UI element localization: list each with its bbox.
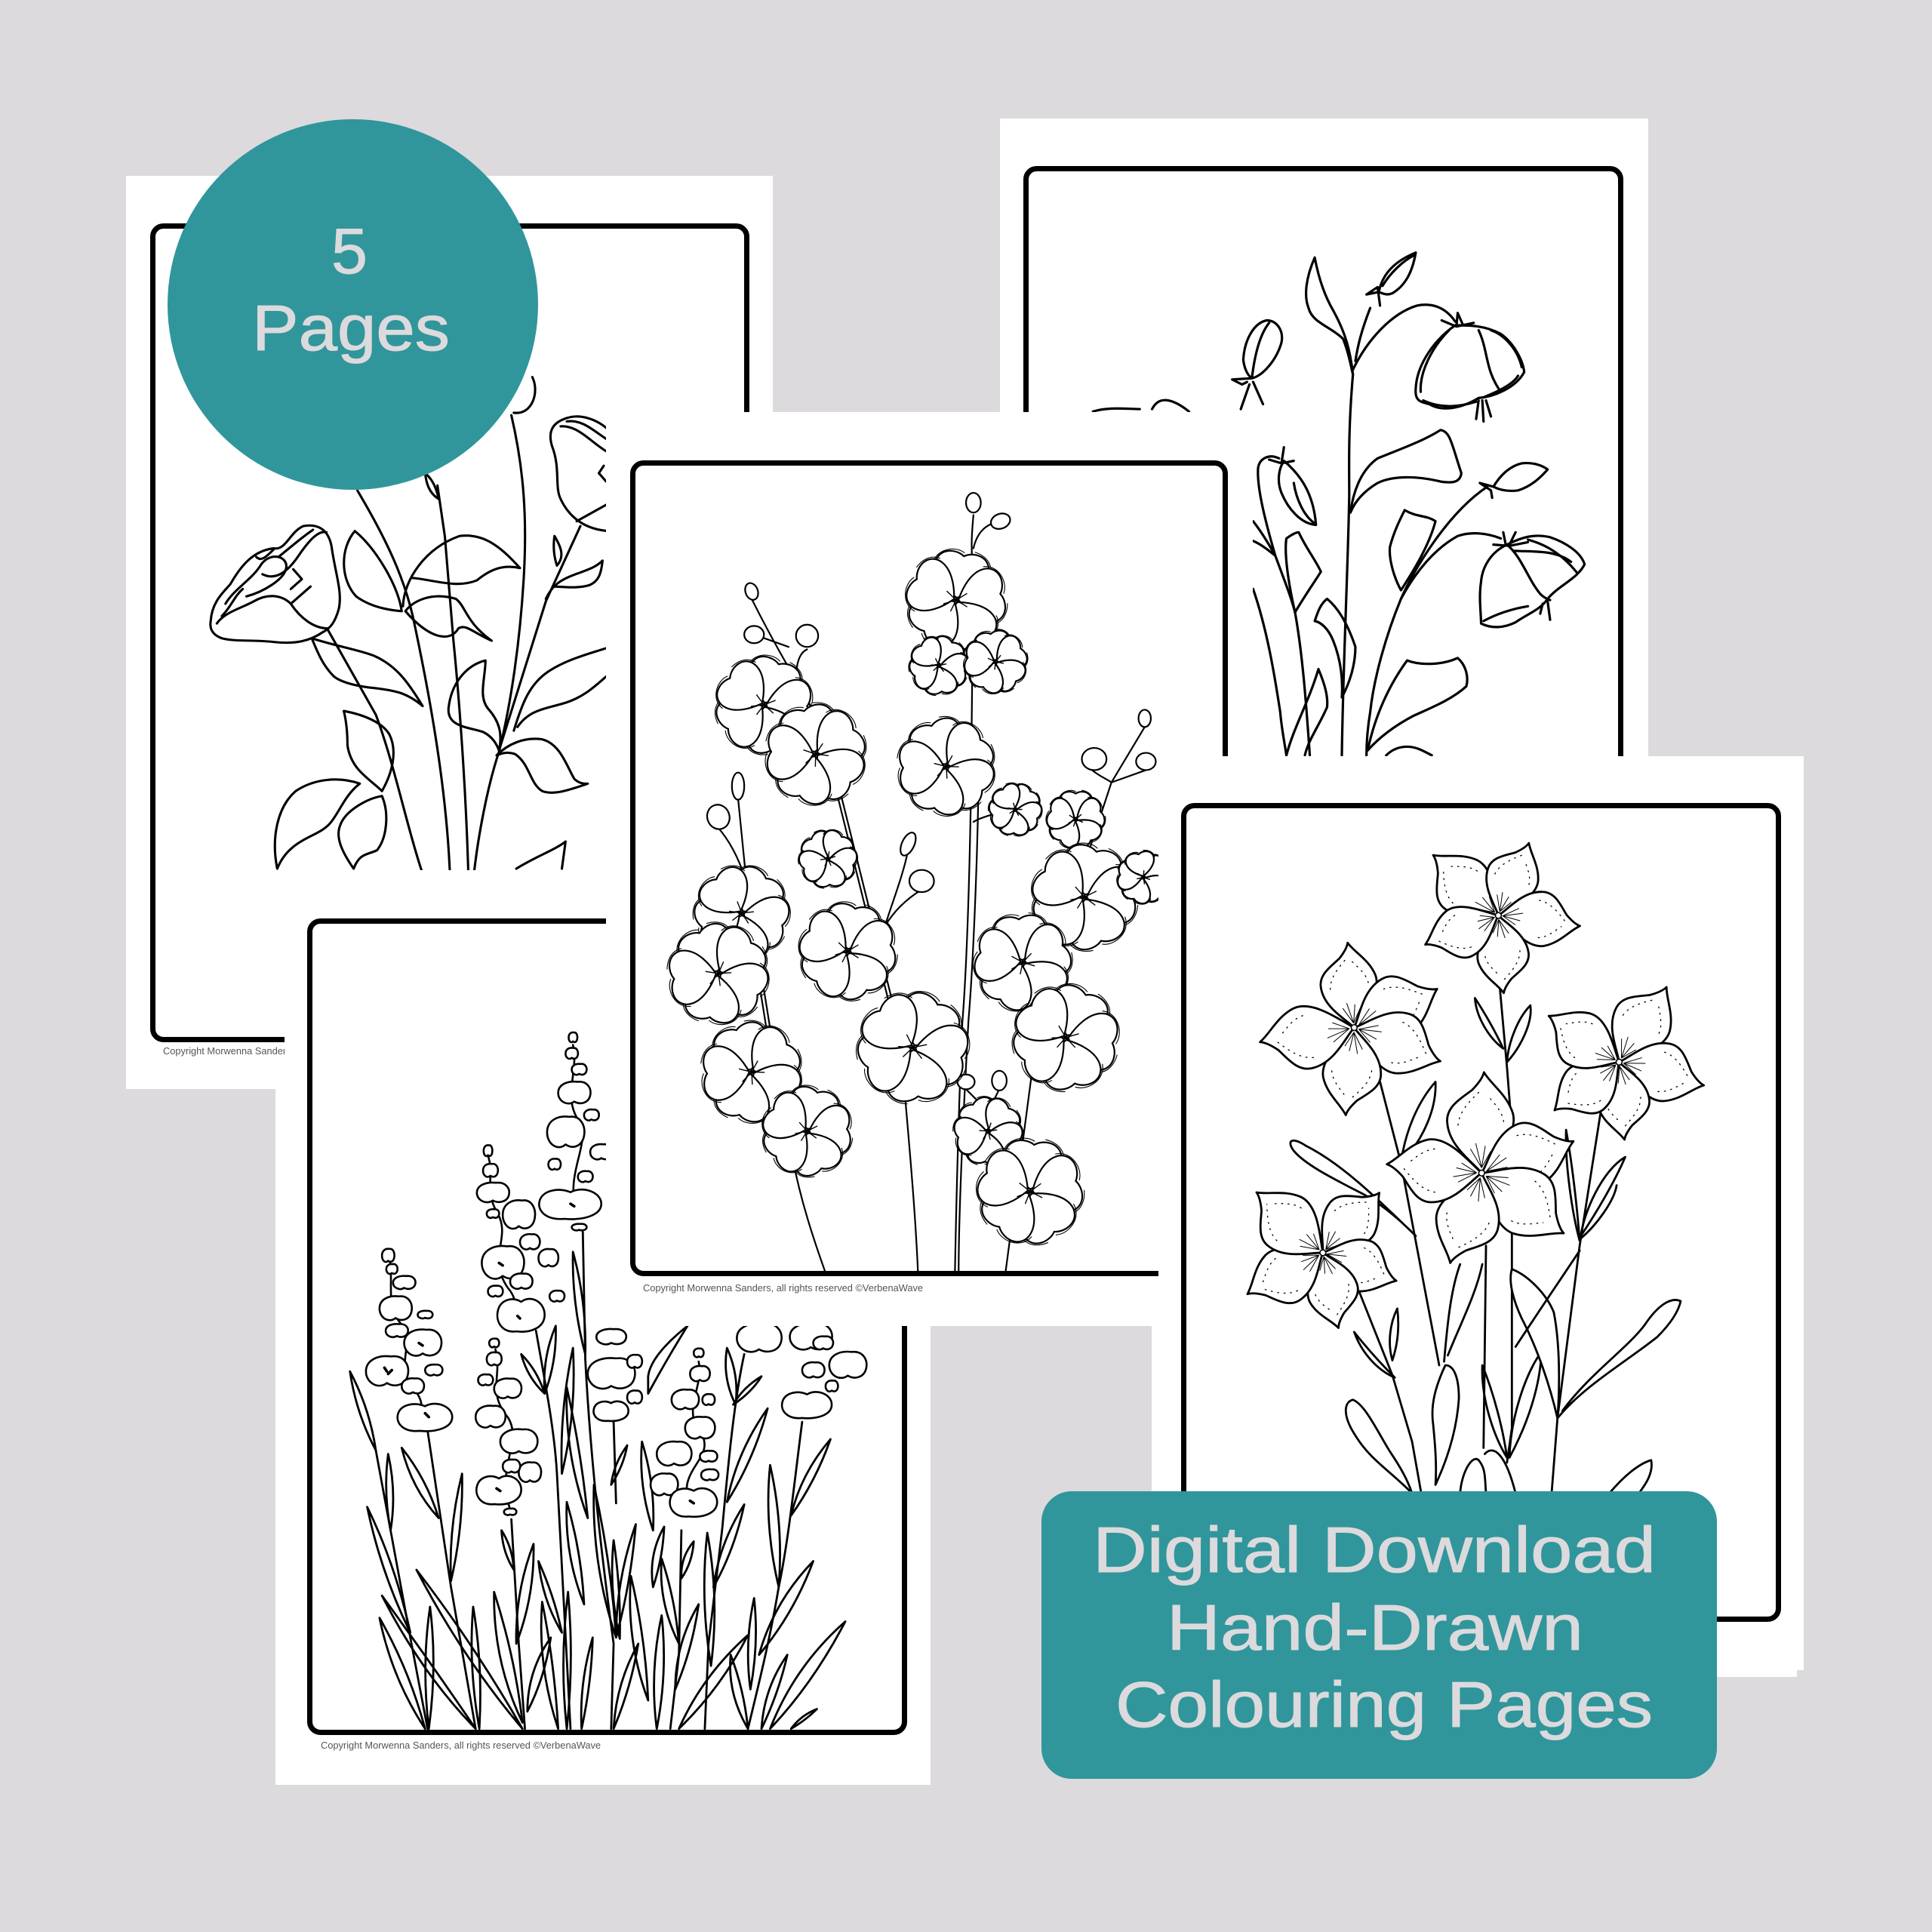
poppy page frame: [1026, 169, 1621, 983]
banner: digital download: [1041, 1491, 1717, 1779]
page: rose colouring sheet: [126, 176, 773, 1089]
banner line 3: Colouring Pages: [1115, 1669, 1653, 1741]
grass leaves: [350, 1252, 845, 1729]
star flowers: [1411, 832, 1583, 995]
badge label: Pages: [252, 293, 450, 365]
stems and leaves: [1498, 971, 1512, 1463]
star flower drawing: [1235, 832, 1711, 1497]
badge: 5 pages: [168, 119, 538, 490]
rose drawing: [211, 377, 610, 870]
page: blossom colouring sheet: [606, 412, 1253, 1326]
blossom drawing: [645, 493, 1181, 1273]
page: star flower colouring sheet: [1152, 756, 1804, 1677]
page: lavender colouring sheet: [275, 870, 931, 1785]
banner line 1: Digital Download: [1093, 1515, 1656, 1586]
rose copyright line: Copyright Morwenna Sanders, all rights reserved ©VerbenaWave: [163, 1046, 443, 1057]
star flower page frame: [1183, 806, 1778, 1620]
blossom flowers: [693, 640, 832, 777]
page: poppy colouring sheet: [1000, 118, 1648, 983]
lavender drawing: [350, 1032, 866, 1729]
blossom buds: [703, 493, 1155, 1091]
rose page frame: [152, 226, 747, 1040]
blossom copyright line: Copyright Morwenna Sanders, all rights reserved ©VerbenaWave: [643, 1283, 923, 1294]
blossom stems: [955, 515, 1001, 1273]
blossom page frame: [632, 463, 1226, 1274]
lavender page frame: [309, 921, 904, 1733]
stems: [376, 1232, 802, 1729]
poppy drawing: [1093, 253, 1585, 755]
lavender copyright line: Copyright Morwenna Sanders, all rights reserved ©VerbenaWave: [321, 1740, 601, 1751]
badge number: 5: [331, 216, 368, 288]
flower spikes: [366, 1032, 866, 1517]
banner line 2: Hand-Drawn: [1167, 1592, 1583, 1664]
